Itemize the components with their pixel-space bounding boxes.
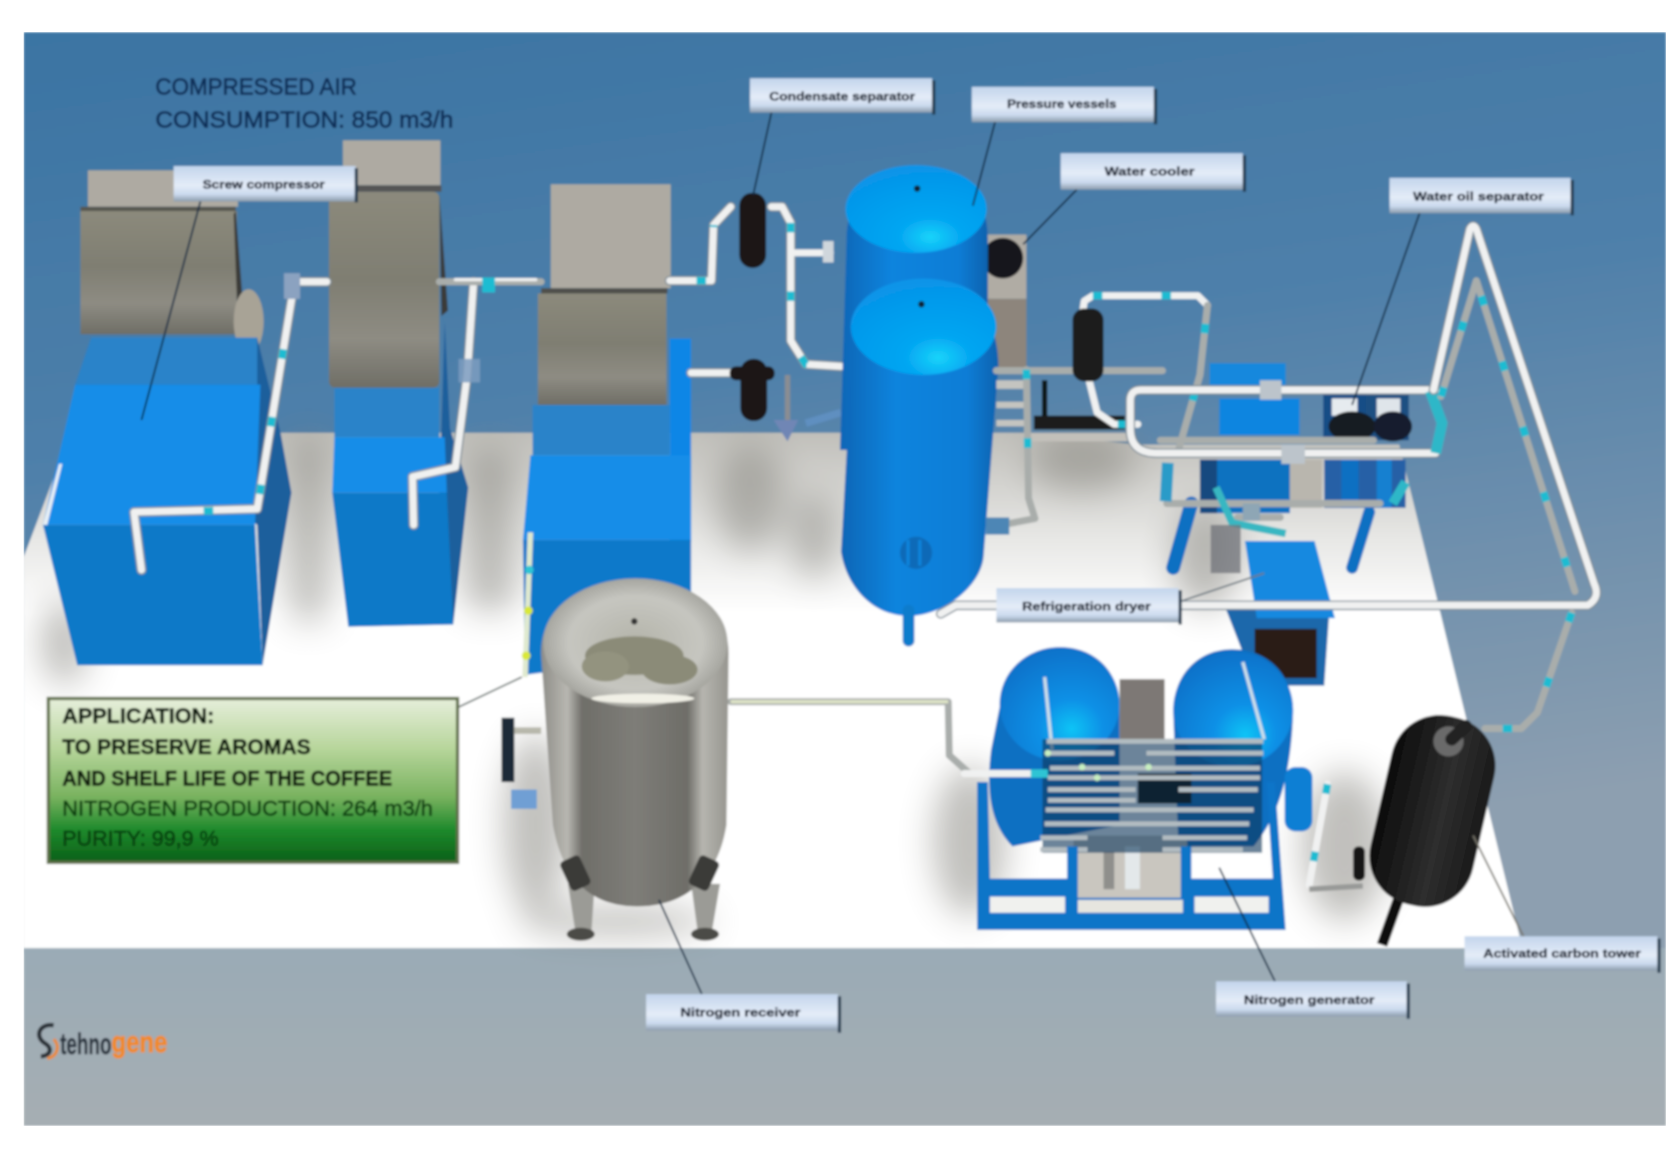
label: water cooler: Water cooler [1105,165,1195,179]
water cooler [985,233,1028,368]
logo: tehnogene: tehno [60,1028,112,1061]
compressor 2 [329,140,468,627]
label: activated carbon tower: Activated carbon tower [1483,947,1641,961]
label: pressure vessels [972,87,1157,124]
label: screw compressor [174,166,358,202]
floor shadows [41,431,1387,936]
main air pipe to carbon tower [941,226,1596,728]
label: water cooler [1061,153,1246,192]
logo: tehnogene [39,1025,167,1061]
compressor 1 [43,170,291,665]
nitrogen receiver [541,578,729,941]
label: condensate separator: Condensate separator [769,90,915,104]
label: screw compressor: Screw compressor [203,178,325,192]
label: nitrogen generator [1216,981,1410,1019]
application callout: TO PRESERVE AROMAS [62,735,311,759]
water oil separator unit [1130,363,1442,573]
label: nitrogen receiver: Nitrogen receiver [680,1006,801,1020]
label: refrigeration dryer: Refrigeration dryer [1022,600,1151,614]
label: refrigeration dryer [996,588,1182,625]
receiver side valves and pipe [501,532,541,809]
ground band [24,948,1666,1126]
activated carbon tower [1353,705,1505,945]
label: condensate separator [750,78,935,115]
leader lines [142,112,1523,994]
application callout: PURITY: 99,9 % [62,826,219,850]
nitrogen generator [977,647,1312,930]
background sky [24,32,1666,953]
label: water oil separator [1390,178,1574,215]
second black separator [1072,309,1104,381]
label: pressure vessels: Pressure vessels [1007,97,1117,111]
logo: tehnogene: gene [112,1026,167,1059]
application callout [48,698,458,862]
pressure vessels [840,165,999,641]
label: water oil separator: Water oil separator [1413,189,1544,203]
condensate separator piping [670,207,841,441]
compressor 3 [523,184,691,675]
title: compressed air consumption: CONSUMPTION: 850 m3/h [155,106,453,132]
application callout: NITROGEN PRODUCTION: 264 m3/h [62,796,433,820]
nitrogen outlet pipes [731,702,1363,889]
condensate separators [730,193,775,421]
air piping middle [986,296,1207,535]
label: nitrogen receiver [646,994,841,1033]
label: activated carbon tower [1465,936,1661,973]
label: nitrogen generator: Nitrogen generator [1244,993,1375,1007]
application callout: AND SHELF LIFE OF THE COFFEE [62,766,392,790]
compressor piping [134,273,541,570]
title: compressed air consumption [155,77,454,129]
refrigeration dryer [1226,541,1335,686]
factory floor [24,433,1522,948]
title: compressed air consumption: COMPRESSED AIR [155,73,357,99]
application callout: APPLICATION: [62,704,214,728]
